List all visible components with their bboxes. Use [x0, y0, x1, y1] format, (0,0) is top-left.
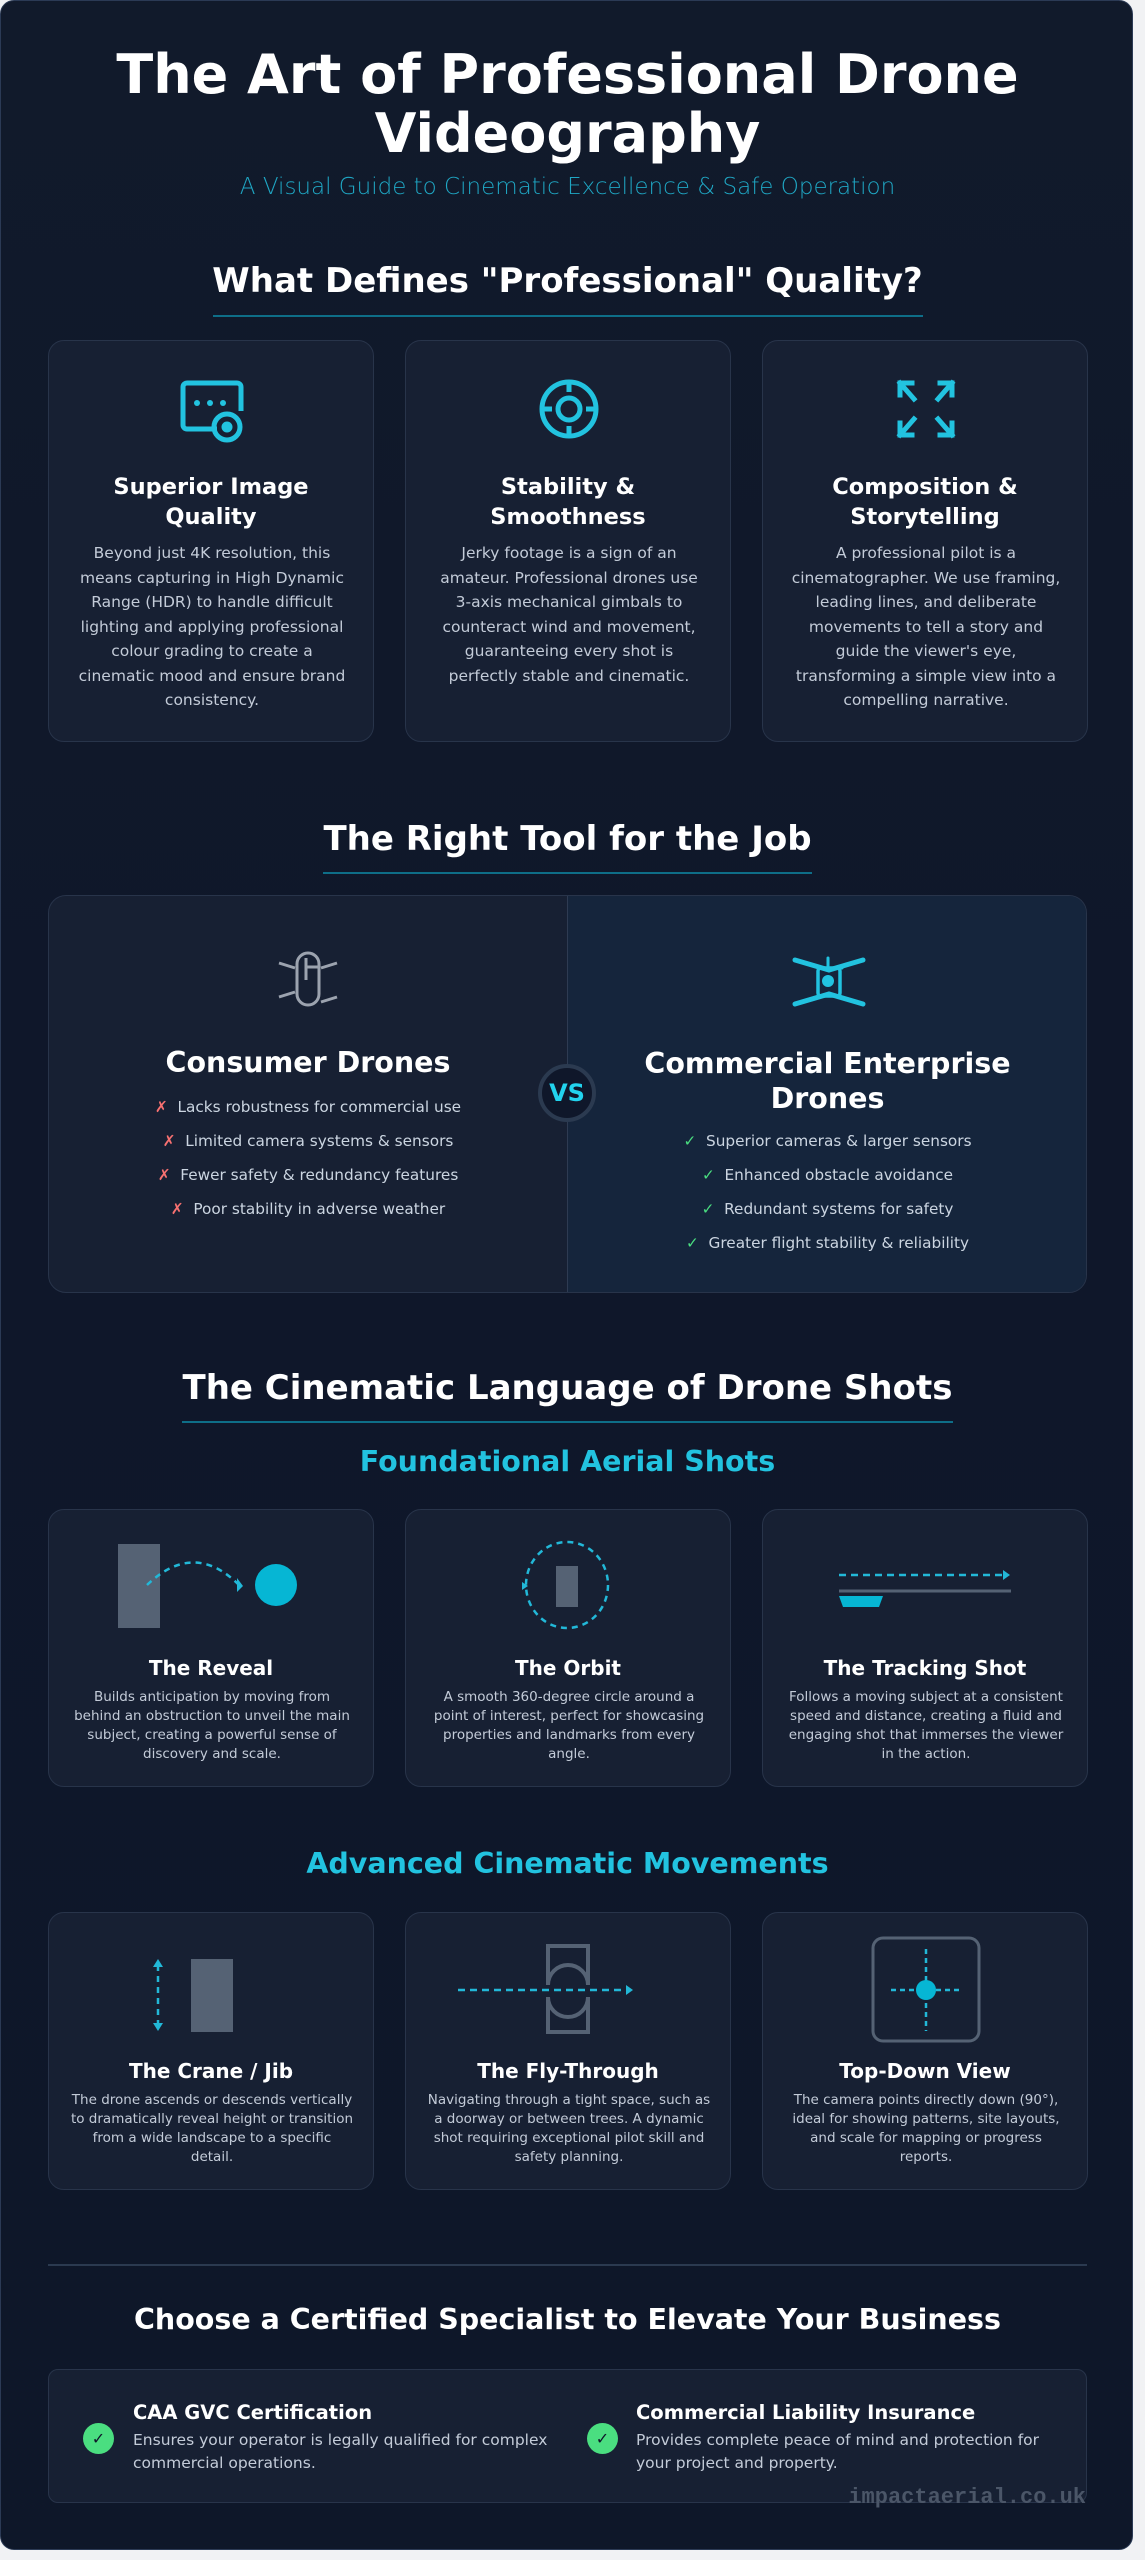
icon: gimbal: [540, 380, 598, 438]
icon: consumer drone: [278, 952, 338, 1006]
title: commercial: Drones: [771, 1082, 884, 1115]
subtitle: A Visual Guide to Cinematic Excellence & Safe Operation: [240, 174, 895, 200]
list: consumer cons: ✗ Fewer safety & redundancy features: [158, 1166, 458, 1184]
heading: right tool: The Right Tool for the Job: [323, 819, 812, 859]
icon: check: ✓: [596, 2429, 609, 2448]
item: insurance: Commercial Liability Insurance: [636, 2401, 975, 2424]
icon: check: [83, 2423, 114, 2454]
card text: The camera points directly down (90°), ideal for showing patterns, site layouts, and scale for mapping or progress reports.: [792, 2092, 1060, 2165]
card text: Navigating through a tight space, such as a doorway or between trees. A dynamic shot requiring exceptional pilot skill and safety planning.: [428, 2092, 710, 2165]
item: CAA GVC: CAA GVC Certification: [133, 2401, 372, 2424]
card title: Quality: [165, 504, 257, 530]
heading: cinematic language: The Cinematic Language of Drone Shots: [183, 1368, 952, 1408]
item: CAA GVC: [83, 2401, 547, 2472]
list: commercial pros: ✓ Redundant systems for safety: [702, 1200, 953, 1218]
list: consumer cons: ✗ Lacks robustness for commercial use: [155, 1098, 461, 1116]
icon: top-down: [872, 1936, 980, 2042]
card title: [832, 474, 1018, 530]
card: stability: [405, 340, 731, 742]
title: commercial: [644, 1047, 1011, 1115]
item: insurance: [587, 2401, 1039, 2472]
subheading: advanced: Advanced Cinematic Movements: [306, 1847, 829, 1880]
card: tracking: [762, 1509, 1088, 1787]
panel: comparison: [48, 895, 1087, 1293]
card text: Beyond just 4K resolution, this means capturing in High Dynamic Range (HDR) to handle difficult lighting and applying professional colour grading to create a cinematic mood and ensure brand consistency.: [79, 544, 345, 709]
list: consumer cons: ✗ Poor stability in adverse weather: [171, 1200, 445, 1218]
heading: certified specialist: Choose a Certified Specialist to Elevate Your Business: [134, 2303, 1001, 2336]
card: fly-through: [405, 1912, 731, 2190]
VS badge: [538, 1064, 596, 1122]
list: commercial pros: ✓ Greater flight stability & reliability: [686, 1234, 969, 1252]
icon: enterprise drone: [792, 956, 866, 1006]
title: The Art of Professional Drone Videography: [116, 43, 1019, 165]
card title: [113, 474, 309, 530]
card title: Smoothness: [490, 504, 646, 530]
card: crane: [48, 1912, 374, 2190]
icon: reveal: [118, 1544, 297, 1628]
card title: Storytelling: [850, 504, 1000, 530]
icon: crane: [153, 1959, 233, 2032]
panel: credentials: [48, 2369, 1087, 2503]
card title: [490, 474, 646, 530]
list: consumer cons: [155, 1098, 461, 1218]
card text: from a wide landscape to a specific: [93, 2130, 331, 2146]
card title: Superior Image: [113, 474, 309, 500]
title: commercial: Commercial Enterprise: [644, 1047, 1011, 1080]
card: reveal: [48, 1509, 374, 1787]
card: top-down: [762, 1912, 1088, 2190]
heading: professional quality: What Defines "Professional" Quality?: [212, 261, 923, 301]
list: commercial pros: [683, 1132, 972, 1252]
card title: Composition &: [832, 474, 1018, 500]
card title: Stability &: [501, 474, 635, 500]
icon: tracking: [839, 1570, 1011, 1607]
card text: The drone ascends or descends vertically: [72, 2092, 352, 2108]
card: composition: [762, 340, 1088, 742]
card text: Follows a moving subject at a consistent speed and distance, creating a fluid and engaging shot that immerses the viewer in the action.: [789, 1689, 1063, 1762]
card title: The Orbit: [515, 1656, 621, 1680]
card text: A professional pilot is a cinematographer. We use framing, leading lines, and deliberate movements to tell a story and guide the viewer's eye, transforming a simple view into a compelling narrative.: [792, 544, 1060, 709]
item: insurance: Provides complete peace of mind and protection for your project and property.: [636, 2431, 1039, 2472]
list: commercial pros: ✓ Superior cameras & larger sensors: [683, 1132, 972, 1150]
item: CAA GVC: Ensures your operator is legally qualified for complex commercial operations.: [133, 2431, 547, 2472]
card text: detail.: [191, 2149, 233, 2165]
commercial side: [644, 956, 1011, 1252]
icon: expand arrows: [896, 380, 956, 438]
title: consumer: Consumer Drones: [166, 1046, 450, 1079]
card text: Jerky footage is a sign of an amateur. Professional drones use 3-axis mechanical gimbals to counteract wind and movement, guaranteeing every shot is perfectly stable and cinematic.: [440, 544, 698, 684]
card title: The Reveal: [149, 1656, 273, 1680]
card title: The Fly-Through: [477, 2059, 659, 2083]
card title: The Tracking Shot: [824, 1656, 1026, 1680]
VS badge: VS: [549, 1079, 585, 1107]
subheading: foundational: Foundational Aerial Shots: [360, 1445, 775, 1478]
card text: Builds anticipation by moving from behind an obstruction to unveil the main subject, creating a powerful sense of discovery and scale.: [74, 1689, 350, 1762]
icon: fly-through: [458, 1944, 633, 2034]
icon: image quality: [180, 380, 244, 442]
watermark: impactaerial.co.uk: [848, 2485, 1086, 2510]
card title: The Crane / Jib: [129, 2059, 293, 2083]
card: orbit: [405, 1509, 731, 1787]
card text: [71, 2092, 353, 2165]
icon: orbit: [522, 1540, 610, 1630]
card text: to dramatically reveal height or transition: [71, 2111, 353, 2127]
consumer side: [155, 952, 461, 1218]
icon: check: [587, 2423, 618, 2454]
card: image quality: [48, 340, 374, 742]
list: consumer cons: ✗ Limited camera systems & sensors: [163, 1132, 453, 1150]
list: commercial pros: ✓ Enhanced obstacle avoidance: [702, 1166, 953, 1184]
card text: A smooth 360-degree circle around a point of interest, perfect for showcasing properties and landmarks from every angle.: [434, 1689, 704, 1762]
card title: Top-Down View: [839, 2059, 1011, 2083]
icon: check: ✓: [92, 2429, 105, 2448]
